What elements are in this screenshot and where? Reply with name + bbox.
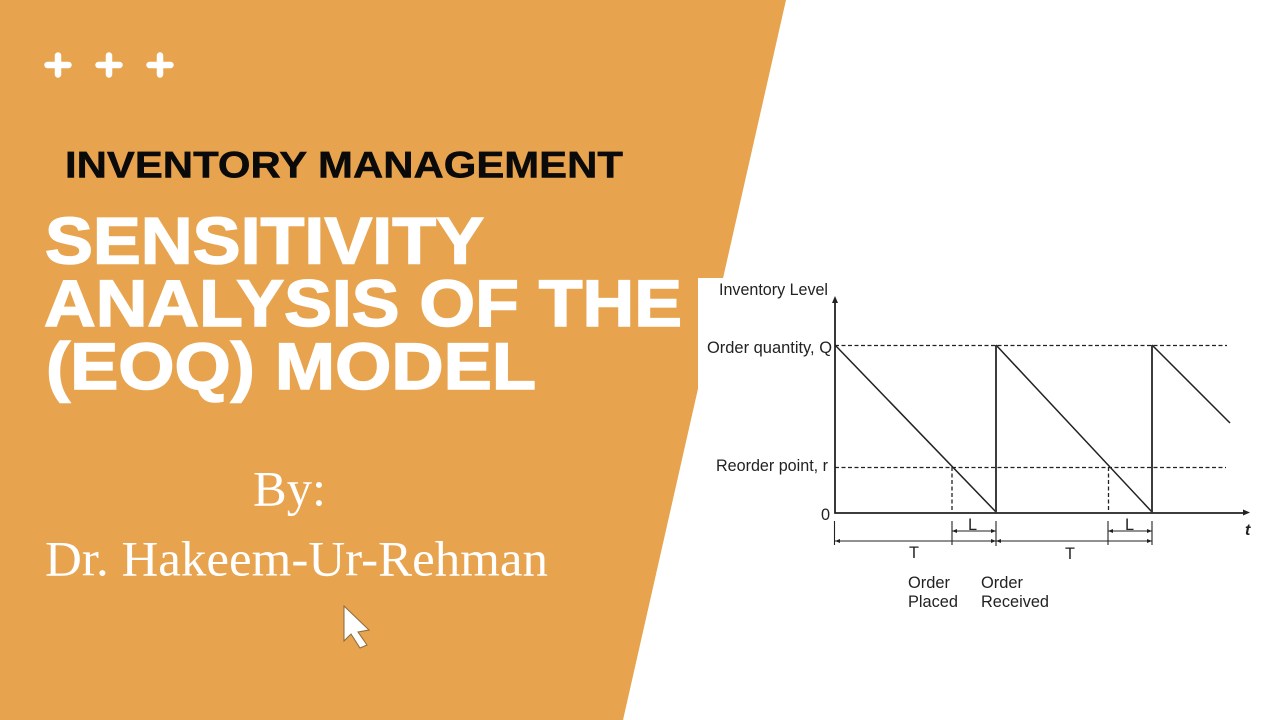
- chart labels: L: [1125, 516, 1134, 534]
- chart labels: [707, 281, 1251, 611]
- chart labels: Inventory Level: [719, 281, 828, 299]
- icon: mouse cursor: [344, 606, 369, 648]
- chart labels: 0: [821, 506, 830, 524]
- chart axes: [835, 299, 1246, 513]
- author name: Dr. Hakeem-Ur-Rehman: [45, 530, 548, 586]
- icon: axis arrowheads: [832, 296, 1250, 516]
- chart labels: L: [968, 516, 977, 534]
- heading: inventory management: INVENTORY MANAGEMENT: [65, 144, 623, 186]
- title: sensitivity analysis of the EOQ model: SENSITIVITY: [45, 204, 484, 278]
- sawtooth inventory line: [835, 345, 1230, 513]
- chart labels: Received: [981, 593, 1049, 611]
- chart labels: t: [1245, 522, 1251, 539]
- chart labels: Reorder point, r: [716, 457, 829, 475]
- title: sensitivity analysis of the EOQ model: [44, 204, 682, 403]
- chart labels: Placed: [908, 593, 958, 611]
- chart labels: Order quantity, Q: [707, 339, 832, 357]
- time interval markers: [834, 521, 1152, 546]
- chart labels: T: [1065, 545, 1075, 563]
- dashed reference levels: [835, 346, 1227, 513]
- title: sensitivity analysis of the EOQ model: ANALYSIS OF THE: [44, 266, 682, 340]
- icon: three plus signs: [48, 56, 170, 74]
- title: sensitivity analysis of the EOQ model: (EOQ) MODEL: [46, 329, 536, 403]
- icon: interval arrowheads: [835, 529, 1152, 543]
- panel: EOQ chart image: [698, 278, 1280, 638]
- chart labels: Order: [908, 574, 951, 592]
- chart labels: Order: [981, 574, 1024, 592]
- chart labels: T: [909, 544, 919, 562]
- author label: by: By:: [253, 460, 326, 516]
- panel: orange background: [0, 0, 786, 720]
